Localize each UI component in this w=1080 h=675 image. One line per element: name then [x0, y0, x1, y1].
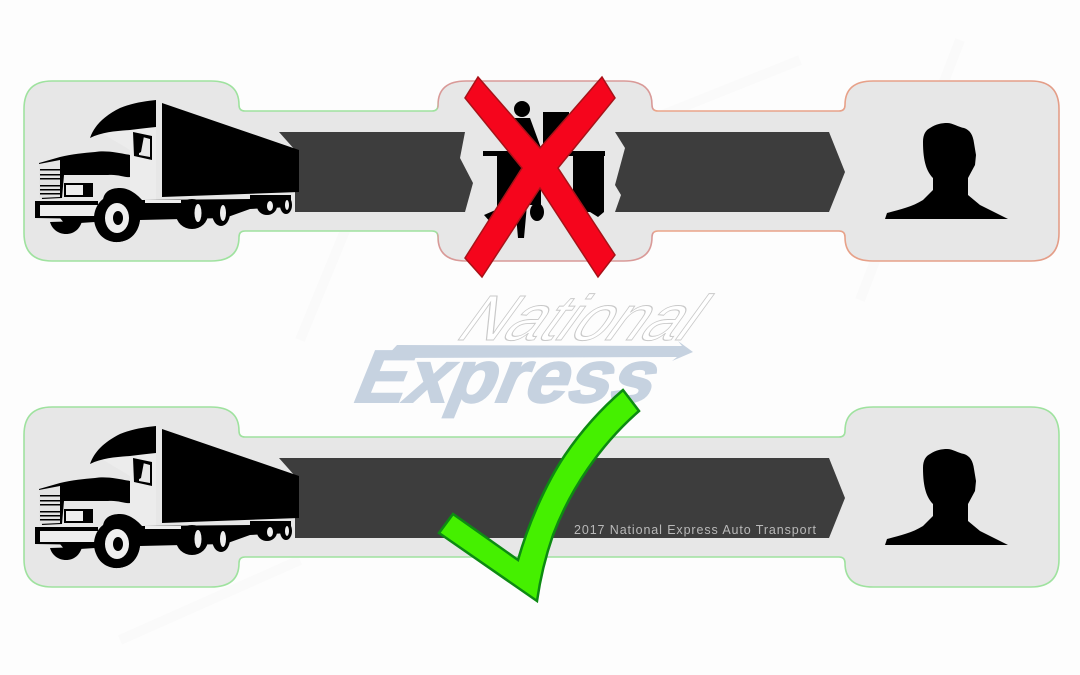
- icon: customer: [885, 123, 1008, 219]
- icon: truck: [35, 426, 299, 568]
- icon: green check mark: [439, 390, 639, 601]
- logo arrow: [385, 341, 693, 361]
- logo: National Express: [343, 283, 726, 418]
- arrow: solid bar: [279, 458, 845, 538]
- icon: truck: [35, 100, 299, 242]
- panel: broker route (top row): [24, 77, 1059, 277]
- icon: red cross: [465, 77, 615, 277]
- icon: customer: [885, 449, 1008, 545]
- panel: direct route (bottom row): [24, 390, 1059, 601]
- arrow: broken bar right: [615, 132, 845, 212]
- arrow: broken bar left: [279, 132, 473, 212]
- copyright text: 2017 National Express Auto Transport: [574, 523, 817, 537]
- icon: broker at desk: [483, 101, 605, 238]
- logo word: Express: Express: [343, 336, 675, 418]
- logo word: National: National: [443, 283, 726, 354]
